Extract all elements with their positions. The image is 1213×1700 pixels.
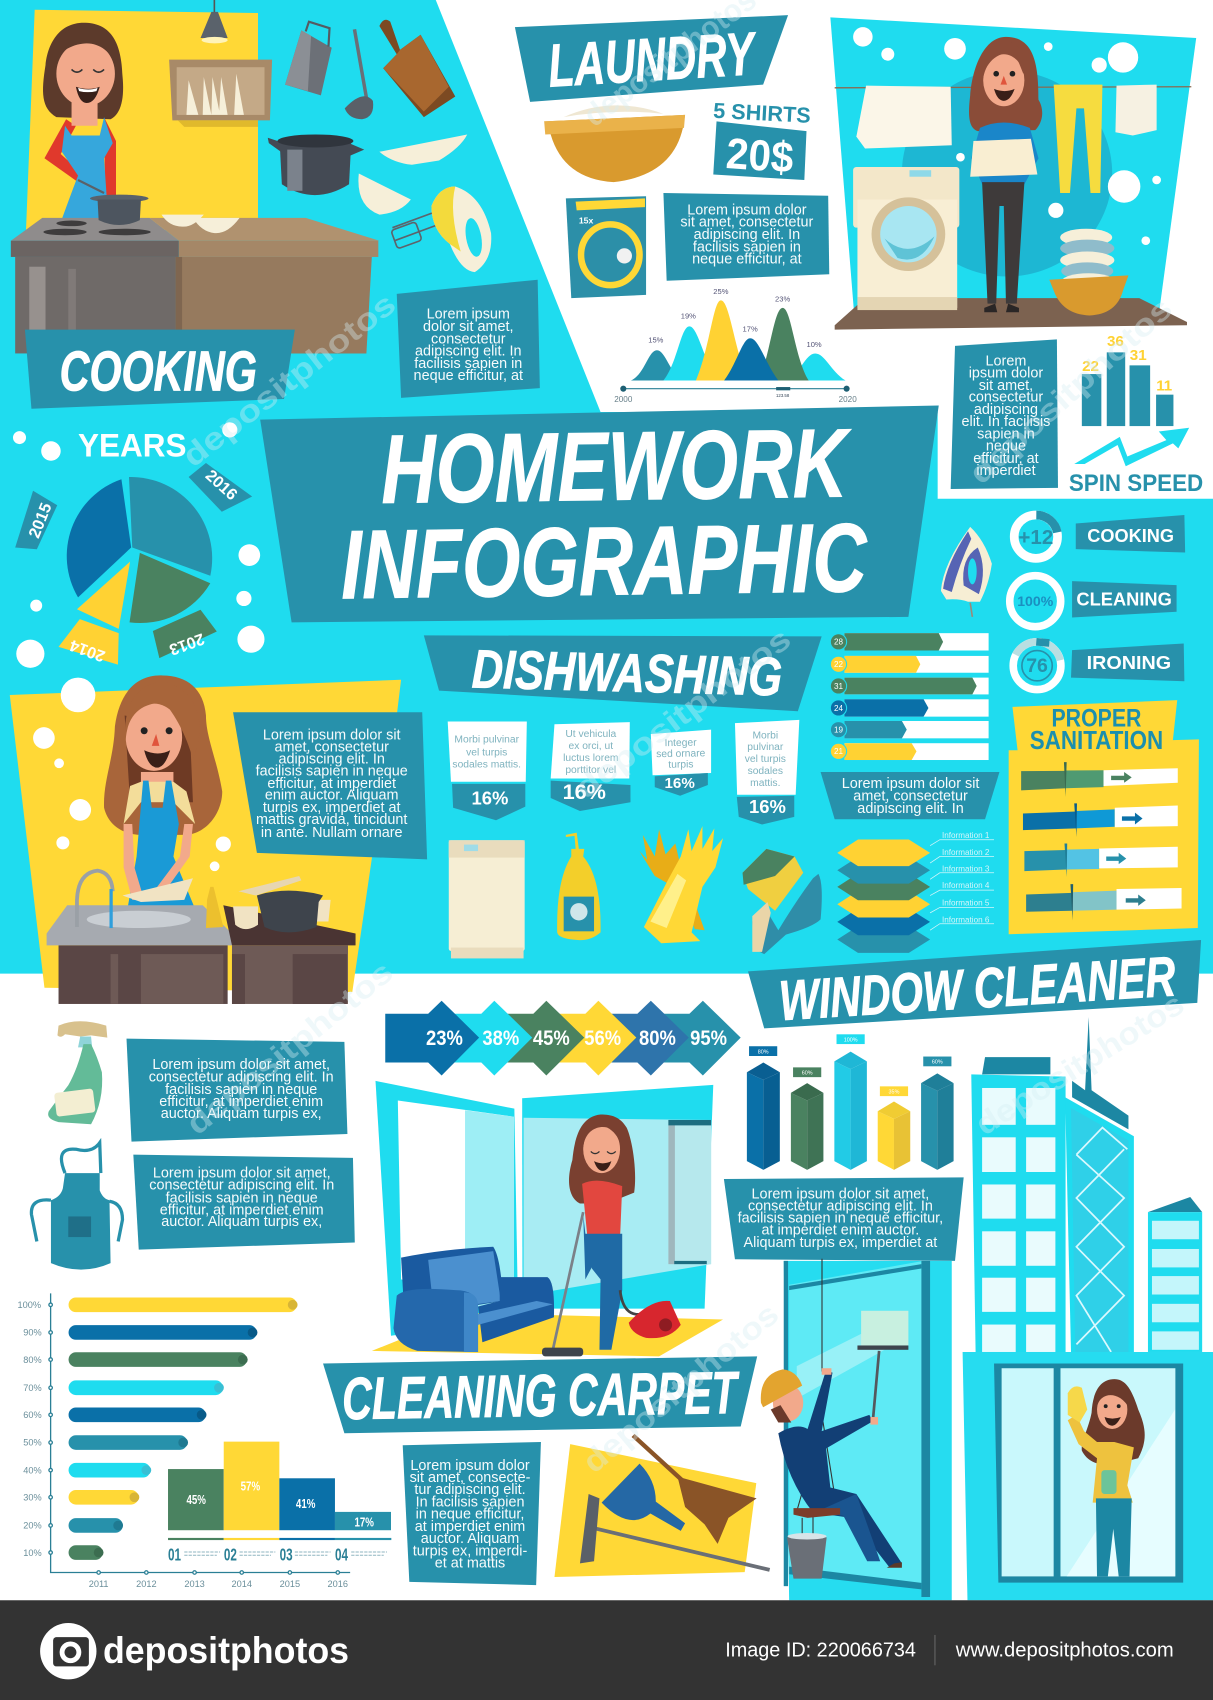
watermarks: depositphotos [576, 1296, 785, 1480]
watermarks: depositphotos [569, 621, 797, 806]
chart: horizontal percentage bars: 90% [23, 1328, 42, 1338]
squeegee [857, 1311, 908, 1424]
icon: broom [633, 1435, 757, 1544]
panel: dishwashing scene [10, 675, 427, 1004]
chart: percentage arrows: 80% [639, 1025, 676, 1050]
text block: dishwashing: amet, consectetur [274, 739, 389, 755]
watermarks: depositphotos [176, 286, 402, 474]
text block: spin speed: Lorem [986, 353, 1026, 369]
banner: cleaning carpet [323, 1356, 757, 1433]
panel: cooking [11, 0, 540, 409]
text block: cooking [397, 280, 540, 398]
card 4: mattis. [750, 778, 780, 789]
heading: proper sanitation: SANITATION [1030, 725, 1163, 755]
text block: dishwashing: turpis ex, imperdiet at [263, 800, 401, 816]
small cloth [1115, 85, 1157, 136]
bar chart: spin speed: 36 [1107, 333, 1124, 350]
area chart: 10% [807, 340, 822, 349]
text block: spray: Lorem ipsum dolor sit amet, [152, 1057, 330, 1073]
text block: spin speed: adipiscing [974, 402, 1038, 418]
card 1: vel turpis [466, 748, 507, 759]
character: woman washing dishes [104, 675, 222, 906]
clothesline [835, 87, 1191, 88]
card 2: luctus lorem [563, 753, 618, 764]
text block: laundry: adipiscing elit. In [694, 227, 800, 243]
banner: laundry [515, 15, 788, 102]
text block: carpet: auctor. Aliquam [421, 1531, 519, 1547]
panel: ironing stats [941, 515, 1185, 690]
card 2: Ut vehicula [565, 729, 616, 740]
text block: dishwashing bars: Lorem ipsum dolor sit [842, 776, 979, 792]
character: woman with cloth [1068, 1379, 1145, 1576]
text block: spray [127, 1039, 347, 1142]
card 1: sodales mattis. [452, 760, 521, 771]
card 4: vel turpis [745, 754, 786, 765]
bubbles [33, 678, 231, 871]
text block: spin speed: elit. In facilisis [962, 414, 1050, 430]
character: window cleaner [761, 1368, 902, 1568]
icons: bowls on counter [162, 215, 240, 233]
text block: window cleaner: consectetur adipiscing elit. In [748, 1198, 933, 1214]
chart: step bars: 02 [224, 1545, 237, 1565]
tag: 2016: 2016 [202, 466, 241, 504]
chart: horizontal percentage bars: 30% [23, 1493, 42, 1503]
icon: detergent box: 15x [579, 215, 593, 225]
heading: laundry: LAUNDRY [546, 19, 760, 100]
text block: cooking: adipiscing elit. In [415, 344, 522, 360]
area chart: 15% [648, 336, 664, 345]
text block: dishwashing bars: amet, consectetur [853, 789, 968, 805]
layered information chart: Information 6 [942, 916, 990, 925]
area chart: 17% [743, 325, 758, 334]
panel: cleaning products [31, 1021, 355, 1270]
text block: laundry [663, 193, 829, 281]
card 1: Morbi pulvinar [454, 735, 520, 746]
chart: step bars: 17% [354, 1515, 374, 1530]
card 3: turpis [668, 759, 694, 771]
icon: soap bottle [206, 887, 223, 928]
card 4: sodales [748, 766, 783, 777]
card 4 [735, 720, 799, 825]
panel: laundry scene [830, 17, 1196, 330]
cyan background panel [0, 0, 1213, 974]
text block: cooking: Lorem ipsum [427, 307, 510, 323]
icon: dish rack [169, 60, 272, 127]
chart: horizontal percentage bars: 80% [23, 1355, 42, 1365]
panel: cleaning tools [554, 1435, 770, 1577]
card 4: 16% [749, 796, 786, 817]
icon: hand mixer [391, 186, 491, 272]
text block: spray: consectetur adipiscing elit. In [149, 1069, 334, 1085]
text block: spray: auctor. Aliquam turpis ex, [161, 1106, 322, 1122]
label: ironing: IRONING [1087, 652, 1171, 673]
heading: cleaning carpet: CLEANING CARPET [342, 1359, 740, 1432]
icon: ladle [345, 29, 373, 119]
ring: 100%: 100% [1017, 593, 1054, 609]
chart: horizontal percentage bars: 20% [23, 1521, 42, 1531]
text block: carpet: in neque efficitur, [416, 1507, 524, 1523]
card 2: 16% [563, 779, 606, 804]
card 3: sed ornare [656, 748, 706, 760]
bars: six progress arrows: 28 [834, 638, 843, 647]
text block: window cleaner [724, 1177, 964, 1261]
character: woman with laundry [969, 37, 1042, 312]
bar chart: spin speed: 11 [1156, 377, 1172, 394]
label: cleaning: CLEANING [1076, 589, 1172, 610]
text block: spin speed: efficitur, at [973, 451, 1039, 467]
card 4: pulvinar [747, 742, 784, 753]
chart: percentage arrows: 23% [426, 1025, 463, 1050]
carpet [372, 1313, 723, 1356]
chart: percentage arrows [385, 1001, 741, 1076]
text block: dishwashing: efficitur, at imperdiet [267, 776, 396, 792]
arrow: rising trend [1074, 428, 1189, 466]
row 1 [1021, 762, 1178, 797]
tag: 2015: 2015 [25, 500, 56, 541]
image id: Image ID: 220066734 [725, 1640, 916, 1662]
icon: iron [941, 527, 992, 617]
chart: horizontal percentage bars: 70% [23, 1383, 42, 1393]
banner: window cleaner [748, 940, 1201, 1032]
chart: 3D bars: 60% [802, 1070, 813, 1076]
text block: spray: efficitur, at imperdiet enim [159, 1094, 323, 1110]
watermarks: depositphotos [962, 291, 1179, 491]
text block: laundry: neque efficitur, at [692, 251, 802, 267]
layered information chart: Information 4 [942, 881, 990, 890]
icon: cutting board [379, 20, 455, 117]
text block: apron: auctor. Aliquam turpis ex, [161, 1214, 322, 1230]
text block: dishwashing bars: adipiscing elit. In [857, 801, 964, 817]
bars: six progress arrows: 21 [834, 747, 843, 756]
text block: dishwashing: mattis gravida, tincidunt [256, 812, 407, 828]
label: spin speed: SPIN SPEED [1069, 470, 1203, 497]
label: ironing [1071, 643, 1184, 681]
text block: window cleaner: Aliquam turpis ex, imperdiet at [744, 1235, 937, 1251]
area chart: 25% [713, 287, 729, 296]
label: cooking: COOKING [1087, 525, 1174, 546]
icon: pot on stove [90, 195, 149, 225]
area chart [614, 287, 857, 404]
chart: percentage arrows: 38% [482, 1025, 519, 1050]
panel: buildings [971, 1017, 1202, 1352]
icon: grater [285, 22, 332, 95]
heading: dishwashing: DISHWASHING [471, 639, 783, 707]
layered information chart [837, 831, 994, 953]
ring: 76: 76 [1026, 655, 1048, 677]
chart: step bars: 01 [168, 1545, 181, 1565]
watermarks: depositphotos [969, 986, 1190, 1142]
tag: 2014: 2014 [67, 636, 108, 665]
title: line 2: INFOGRAPHIC [340, 503, 869, 619]
ring: +12 [1014, 515, 1058, 558]
building 3 [1148, 1197, 1202, 1352]
building 2 [1065, 1017, 1134, 1352]
building 1 [971, 1057, 1066, 1352]
banner: dishwashing [424, 635, 822, 711]
layered information chart: Information 5 [942, 898, 990, 907]
chart: percentage arrows: 56% [584, 1025, 621, 1050]
chart: horizontal percentage bars: 50% [23, 1438, 42, 1448]
area chart: 23% [775, 294, 790, 303]
bars: six progress arrows: 24 [834, 704, 843, 713]
text block: carpet: Lorem ipsum dolor [410, 1458, 530, 1474]
chart: percentage arrows: 95% [690, 1025, 727, 1050]
chart: 3D bars: 80% [758, 1049, 769, 1055]
text block: spin speed: sit amet, [979, 378, 1033, 394]
bar chart: spin speed: 31 [1130, 347, 1147, 364]
heading: cooking: COOKING [60, 339, 257, 402]
ring: 100% [1010, 576, 1061, 627]
chart: horizontal percentage bars: 100% [17, 1300, 41, 1310]
panel: proper sanitation [1009, 700, 1199, 934]
footer [0, 1600, 1213, 1700]
chart: step bars: 57% [241, 1479, 260, 1494]
text block: laundry: facilisis sapien in [693, 240, 801, 256]
washing machine [853, 167, 959, 310]
yellow panel [10, 680, 401, 992]
text block: dishwashing bars [821, 772, 999, 819]
bar chart: spin speed [1069, 333, 1203, 497]
text block: laundry: Lorem ipsum dolor [687, 203, 807, 219]
panel: years pie chart [13, 422, 264, 668]
text block: window cleaner: Lorem ipsum dolor sit amet, [752, 1186, 929, 1202]
label: cooking [1076, 515, 1185, 552]
stove [11, 218, 179, 353]
logo: depositphotos: depositphotos [103, 1630, 349, 1671]
area chart: 2000 [614, 395, 633, 404]
text block: dishwashing: Lorem ipsum dolor sit [263, 727, 401, 743]
chart: horizontal percentage bars: 2015 [280, 1579, 300, 1589]
label: 5 shirts: 5 SHIRTS [713, 98, 811, 128]
text block: cooking: facilisis sapien in [414, 356, 522, 372]
chart: 3D bars: 35% [889, 1089, 900, 1095]
layered information chart: Information 2 [942, 848, 990, 857]
text block: window cleaner: facilisis sapien in neque efficitur, [738, 1211, 943, 1227]
row 4 [1026, 884, 1182, 920]
laundry stack in basin [1049, 229, 1128, 315]
text block: carpet: at imperdiet enim [415, 1519, 525, 1535]
bar chart: spin speed: 22 [1082, 358, 1099, 375]
icon: sofa [393, 1247, 554, 1352]
icon: ceiling lamp [201, 0, 228, 43]
floor [835, 298, 1187, 330]
area chart: 2020 [839, 395, 857, 404]
card 2: ex orci, ut [568, 741, 613, 752]
layered information chart: Information 1 [942, 831, 990, 840]
text block: apron: Lorem ipsum dolor sit amet, [153, 1165, 331, 1181]
card 1: 16% [472, 787, 508, 808]
ring: +12: +12 [1018, 526, 1053, 549]
text block: dishwashing: in ante. Nullam ornare [261, 825, 403, 841]
chart: horizontal percentage bars: 2016 [328, 1579, 348, 1589]
layered information chart: Information 3 [942, 865, 990, 874]
chart: step bars: 45% [186, 1492, 206, 1507]
icon: sponge and brush [743, 849, 822, 954]
chart: horizontal percentage bars: 10% [23, 1548, 42, 1558]
text block: spin speed: neque [986, 438, 1026, 454]
icon: rubber gloves [640, 826, 723, 943]
text block: carpet: tur adipiscing elit. [414, 1482, 526, 1498]
area chart: 19% [681, 312, 696, 321]
panel: cleaning carpet scene [323, 1081, 770, 1585]
yellow trousers [1054, 85, 1102, 193]
chart: step bars: 03 [280, 1545, 293, 1565]
bars: six progress arrows: 31 [834, 682, 843, 691]
text block: cooking: neque efficitur, at [414, 368, 523, 384]
icon: plate [379, 134, 467, 165]
chart: 3D bars: 60% [932, 1060, 943, 1066]
row 2 [1023, 803, 1178, 837]
icon: bowl [358, 173, 411, 215]
text block: apron: facilisis sapien in neque [166, 1190, 318, 1206]
text block: dishwashing: enim auctor. Aliquam [265, 788, 399, 804]
card 3: 16% [664, 775, 695, 792]
bars: six progress arrows: 22 [834, 660, 843, 669]
character: woman vacuuming [542, 1115, 635, 1356]
text block: carpet: In facilisis sapien [416, 1495, 524, 1511]
text block: spin speed: consectetur [969, 390, 1043, 406]
tag: 2013: 2013 [167, 629, 207, 659]
card 3: Integer [664, 738, 697, 749]
rope [797, 1259, 837, 1540]
text block: apron: efficitur, at imperdiet enim [160, 1202, 324, 1218]
bubbles [13, 422, 264, 668]
icon: dish soap [557, 833, 601, 940]
card 3 [651, 730, 711, 796]
card 1 [448, 722, 527, 820]
price tag: 20$ [725, 130, 795, 183]
chart: horizontal percentage bars: 2014 [231, 1579, 252, 1589]
text block: laundry: sit amet, consectetur [680, 215, 814, 231]
tag: 2014 [59, 619, 119, 665]
icon: cooking pot [268, 134, 364, 195]
area chart: 123.58 [776, 393, 790, 398]
chart: horizontal percentage bars: 2013 [184, 1579, 205, 1589]
chart: horizontal percentage bars: 60% [23, 1410, 42, 1420]
tag: 2015 [15, 491, 57, 549]
icon: dishwasher [449, 840, 525, 958]
icon: detergent box [566, 196, 646, 298]
icon: vacuum cleaner [620, 1290, 681, 1338]
icon: mop [580, 1494, 770, 1570]
dark counter [223, 905, 356, 1004]
windows [375, 1081, 713, 1336]
icon: laundry basin [544, 105, 685, 182]
text block: spin speed: imperdiet [976, 463, 1036, 479]
panel: dishwashing [424, 633, 999, 958]
bars: six progress arrows: 19 [834, 725, 843, 734]
panel: laundry [515, 15, 1203, 497]
icon: apron [31, 1143, 122, 1270]
yellow kitchen wall [26, 10, 258, 230]
icon: spray bottle [48, 1021, 107, 1124]
website: www.depositphotos.com [955, 1640, 1174, 1662]
text block: window cleaner: at imperdiet enim auctor. [762, 1223, 919, 1239]
pie slices [67, 477, 212, 629]
price tag [713, 121, 806, 183]
axes [49, 1293, 350, 1574]
text block: carpet: turpis ex, imperdi- [413, 1543, 527, 1559]
counter [150, 218, 379, 353]
chart: percentage arrows: 45% [533, 1025, 570, 1050]
text block: carpet: et at mattis [435, 1556, 505, 1572]
chart: horizontal percentage bars: 2012 [136, 1579, 157, 1589]
text block: spin speed: sapien in [977, 427, 1035, 443]
heading: years: YEARS [78, 427, 186, 463]
chart: 3D bars: 100% [844, 1037, 858, 1043]
title banner [260, 405, 939, 622]
text block: carpet [403, 1442, 541, 1585]
chart: horizontal percentage bars [17, 1293, 350, 1589]
row 3 [1024, 843, 1178, 877]
text block: cooking: consectetur [431, 332, 506, 348]
chart: step bars: 04 [335, 1545, 348, 1565]
heading: proper sanitation: PROPER [1051, 704, 1141, 732]
text block: apron [133, 1155, 355, 1250]
banner: cooking [25, 330, 295, 409]
text block: spray: facilisis sapien in neque [165, 1082, 317, 1098]
text block: spin speed [951, 339, 1058, 489]
chart: horizontal percentage bars: 40% [23, 1465, 42, 1475]
text block: apron: consectetur adipiscing elit. In [149, 1177, 334, 1193]
text block: dishwashing [233, 712, 427, 859]
character: woman cooking [43, 23, 123, 222]
sink counter [47, 871, 232, 1004]
icon: dustpan [602, 1464, 685, 1531]
card 4: Morbi [752, 730, 778, 741]
logo: depositphotos [40, 1623, 349, 1679]
text block: carpet: sit amet, consecte- [410, 1470, 531, 1486]
tag: 2013 [153, 610, 217, 659]
title: line 1: HOMEWORK [380, 408, 853, 524]
icons: pot and mugs [233, 876, 331, 932]
chart: step bars: 41% [296, 1496, 316, 1511]
card 2: porttitor vel [565, 765, 616, 776]
tag: 2016 [189, 463, 252, 512]
text block: dishwashing: facilisis sapien in neque [256, 764, 408, 780]
text block: cooking: dolor sit amet, [423, 319, 514, 335]
text block: dishwashing: adipiscing elit. In [278, 751, 385, 767]
panel: woman cleaning window [963, 1352, 1213, 1600]
watermarks [176, 0, 1190, 1480]
label: cleaning [1072, 581, 1177, 617]
chart: horizontal percentage bars: 2011 [89, 1579, 109, 1589]
card 2 [551, 722, 630, 811]
text block: spin speed: ipsum dolor [969, 365, 1043, 381]
towel [856, 86, 952, 149]
chart: step bars [168, 1442, 391, 1565]
icon: bucket [787, 1533, 827, 1579]
heading: proper sanitation [1030, 704, 1163, 755]
bars: six progress arrows [830, 633, 989, 760]
ring: 76 [1013, 642, 1061, 690]
panel: window cleaner worker [761, 1259, 952, 1600]
chart: 3D bars [747, 1034, 954, 1170]
watermarks: depositphotos [180, 954, 400, 1142]
